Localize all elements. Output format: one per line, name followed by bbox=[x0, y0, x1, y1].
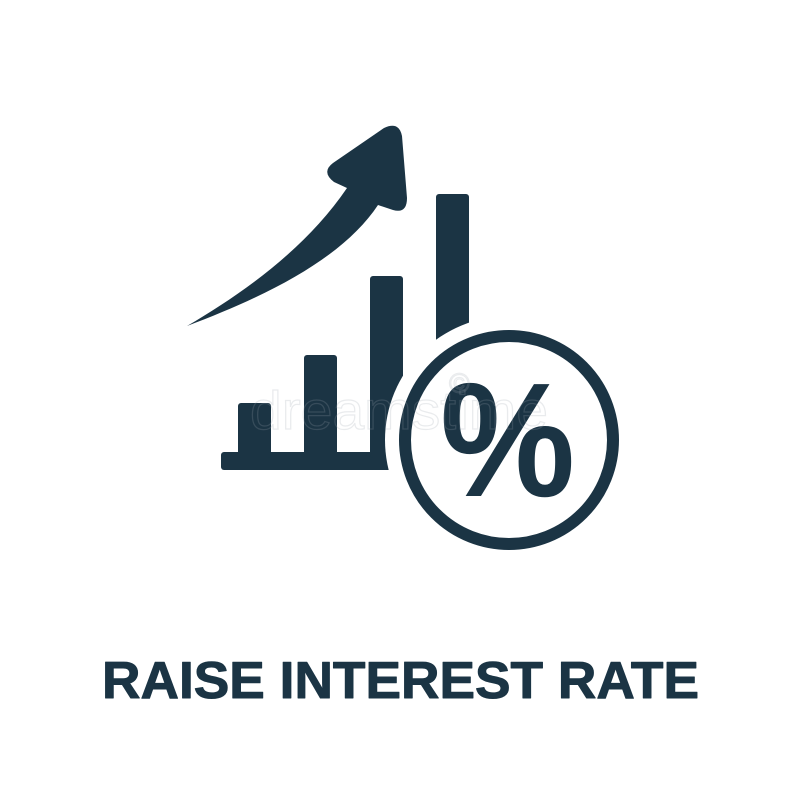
chart baseline bbox=[221, 452, 396, 470]
percent sign: % bbox=[440, 350, 575, 531]
badge ring bbox=[405, 336, 613, 544]
bar chart bbox=[221, 194, 469, 470]
title: RAISE INTEREST RATE bbox=[102, 652, 699, 710]
bar 3 bbox=[370, 276, 403, 458]
badge gap bbox=[385, 316, 633, 564]
watermark wordmark: dreamstime bbox=[250, 381, 548, 441]
percent badge bbox=[385, 316, 633, 564]
bar 1 bbox=[238, 403, 271, 458]
watermark bbox=[250, 368, 548, 441]
bar 4 bbox=[436, 194, 469, 349]
icon: rising arrow bbox=[187, 126, 407, 326]
watermark copyright mark: © bbox=[449, 368, 470, 399]
bar 2 bbox=[304, 355, 337, 458]
